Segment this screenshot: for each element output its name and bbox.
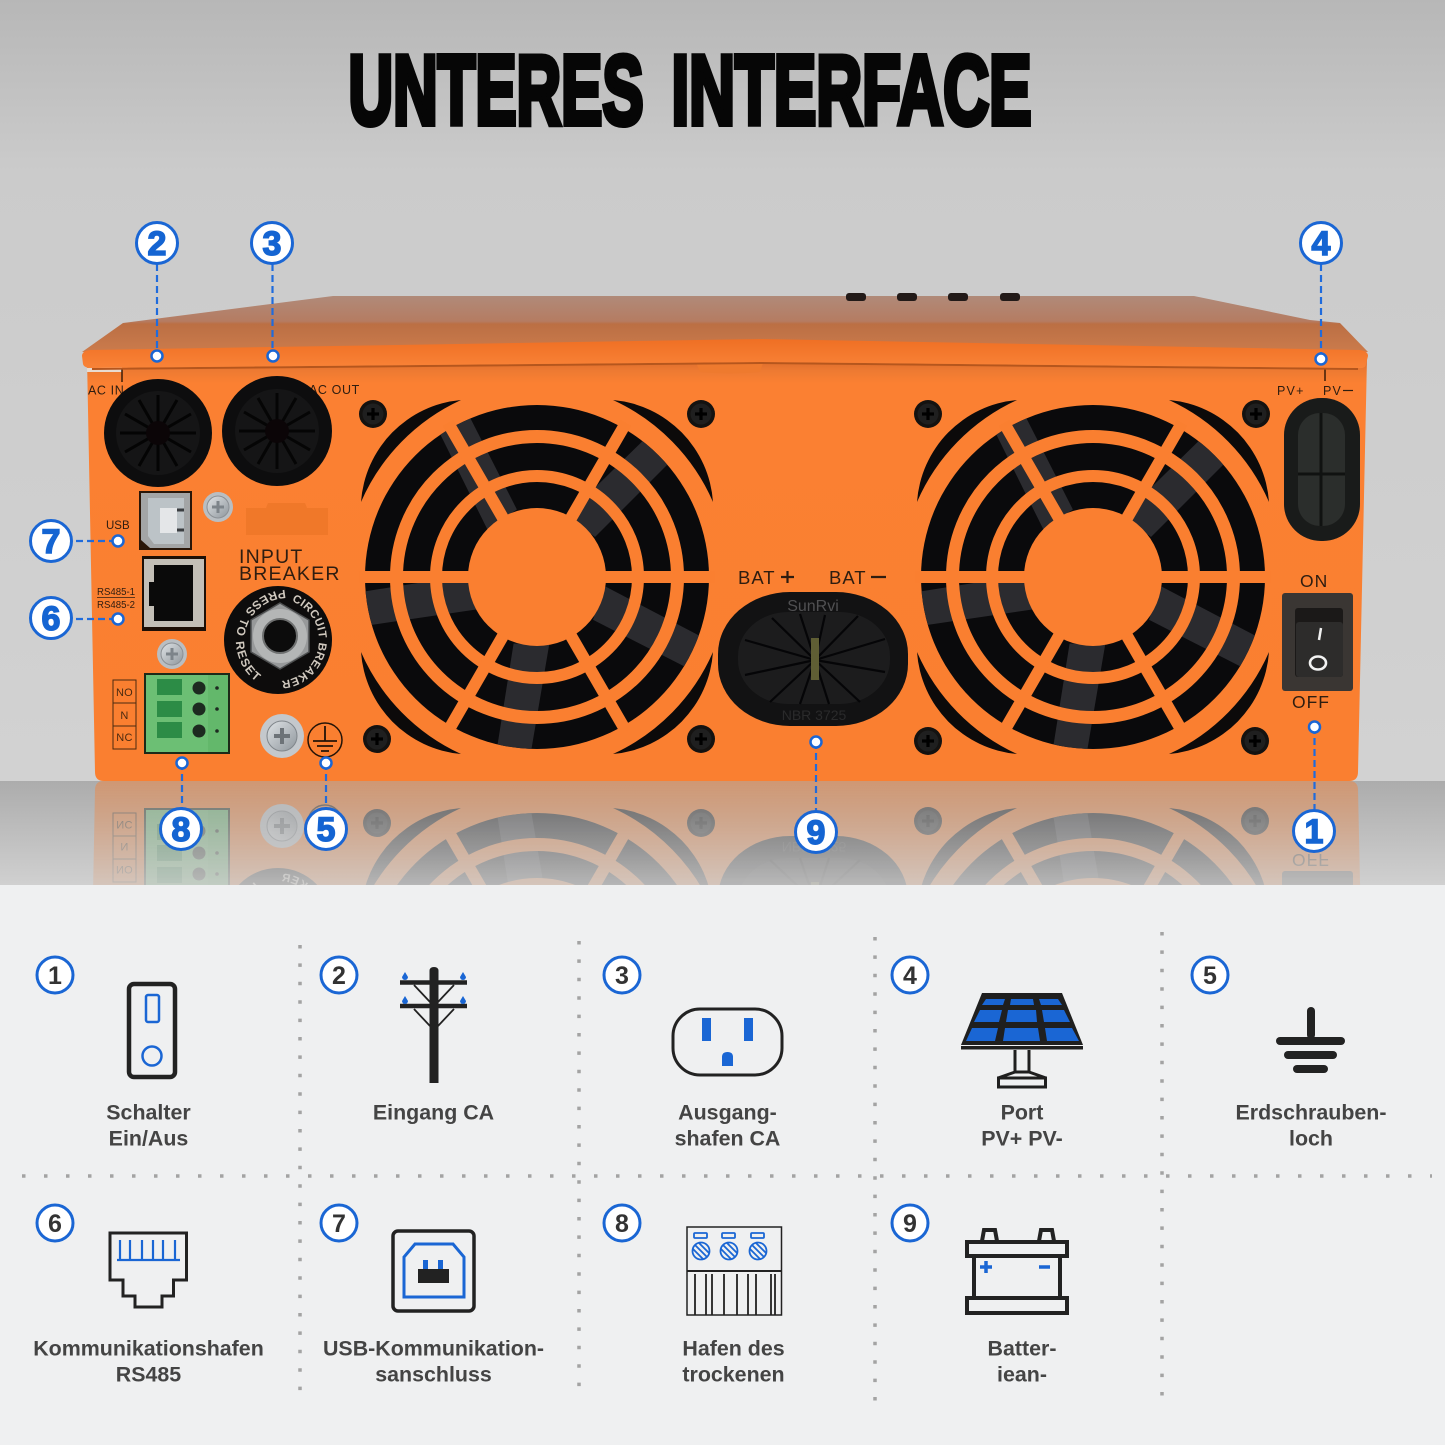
panel item 9: battery: 9 (903, 1210, 917, 1238)
callout 2: AC input: 2 (148, 225, 166, 263)
panel item 8: dry contact (604, 1205, 785, 1386)
panel item 8: dry contact: Hafen des (682, 1336, 785, 1360)
panel item 9: battery: iean- (997, 1362, 1047, 1386)
panel item 9: battery: Batter- (988, 1336, 1056, 1360)
panel item 8: dry contact: 8 (615, 1210, 629, 1238)
callout 6: RS485: 6 (42, 600, 60, 638)
callout 4: PV port: 4 (1312, 225, 1331, 263)
callout 1: on/off switch (1294, 722, 1334, 852)
panel item 1: switch: Ein/Aus (109, 1126, 188, 1150)
callout 5: grounding: 5 (317, 811, 335, 849)
panel item 7: USB (321, 1205, 544, 1386)
panel item 7: USB: sanschluss (375, 1362, 492, 1386)
panel item 7: USB: USB-Kommunikation- (323, 1336, 544, 1360)
panel item 4: PV port: PV+ PV- (981, 1126, 1063, 1150)
panel item 3: AC output: shafen CA (675, 1126, 780, 1150)
inverter top lid (82, 293, 1368, 352)
reflective floor (0, 781, 1445, 885)
panel item 1: switch (37, 957, 191, 1150)
panel item 4: PV port (892, 957, 1083, 1150)
callout 4: PV port (1300, 222, 1342, 364)
callout 3: AC output (252, 222, 292, 362)
callout 5: grounding (306, 758, 346, 850)
panel item 5: ground: loch (1289, 1126, 1333, 1150)
panel item 1: switch: Schalter (106, 1100, 191, 1124)
panel item 5: ground: 5 (1203, 962, 1217, 990)
callout 8: dry contact (160, 758, 202, 850)
callout 6: RS485 (30, 598, 124, 638)
panel item 7: USB: 7 (332, 1210, 346, 1238)
lower info panel (0, 885, 1445, 1445)
panel item 2: AC input (321, 957, 494, 1124)
background wall (0, 0, 1445, 781)
panel item 3: AC output (604, 957, 782, 1150)
panel item 2: AC input: Eingang CA (373, 1100, 494, 1124)
callout 7: USB: 7 (42, 523, 60, 561)
panel item 4: PV port: 4 (903, 962, 917, 990)
panel item 8: dry contact: trockenen (682, 1362, 785, 1386)
panel item 1: switch: 1 (48, 962, 62, 990)
panel item 4: PV port: Port (1001, 1100, 1043, 1124)
title: INTERFACE (672, 35, 1032, 145)
panel item 5: ground (1192, 957, 1386, 1150)
panel item 3: AC output: 3 (615, 962, 629, 990)
title (348, 35, 1032, 145)
callout 8: dry contact: 8 (172, 811, 190, 849)
panel item 9: battery (892, 1205, 1067, 1386)
reflection of inverter on floor (93, 781, 1360, 885)
panel item 6: RS485 (33, 1205, 264, 1386)
panel item 6: RS485: RS485 (116, 1362, 181, 1386)
panel item 6: RS485: 6 (48, 1210, 62, 1238)
callout 1: on/off switch: 1 (1305, 813, 1323, 851)
title: UNTERES (348, 35, 644, 145)
panel item 2: AC input: 2 (332, 962, 346, 990)
panel item 3: AC output: Ausgang- (678, 1100, 777, 1124)
callout 3: AC output: 3 (263, 225, 281, 263)
panel item 6: RS485: Kommunikationshafen (33, 1336, 264, 1360)
callout 9: battery (796, 736, 836, 852)
callout 9: battery: 9 (807, 814, 825, 852)
panel item 5: ground: Erdschrauben- (1236, 1100, 1386, 1124)
callout 7: USB (30, 520, 124, 562)
callout 2: AC input (136, 222, 178, 362)
inverter rear panel with ports and fans (82, 339, 1368, 784)
